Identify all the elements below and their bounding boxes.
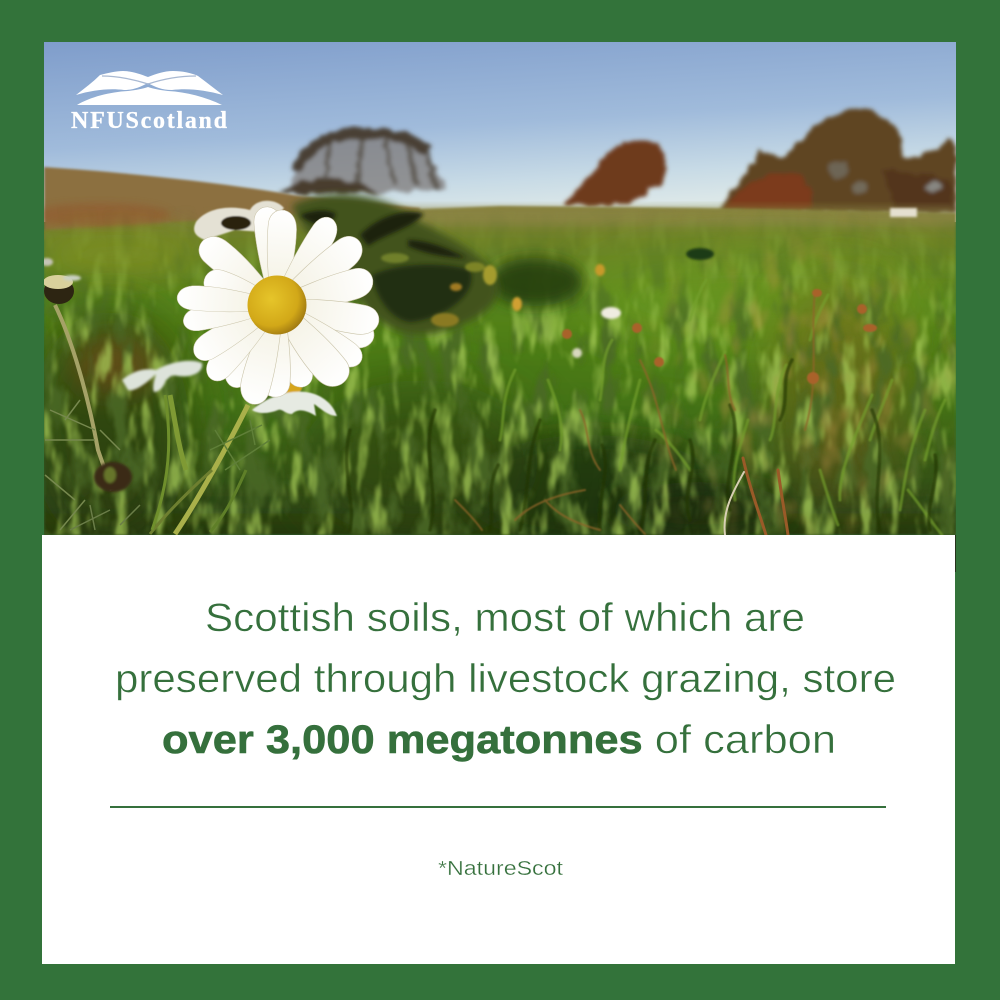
blurred daisy, left	[122, 361, 202, 392]
tree: centre right	[564, 139, 666, 206]
foreground brown stalks	[725, 458, 788, 535]
far field strip	[300, 207, 956, 225]
dark grass clump	[686, 248, 714, 260]
line 3: over 3,000 megatonnes of carbon	[162, 718, 836, 762]
daisy, lower behind	[252, 382, 337, 416]
daisy bud, left	[41, 258, 81, 304]
line 1: Scottish soils, most of which are	[205, 596, 805, 640]
seed head, lower left	[94, 462, 132, 492]
dark shadow patch in field	[487, 258, 583, 306]
NFU Scotland logo	[71, 71, 228, 134]
small dark edge beside panel	[955, 535, 956, 572]
line 2: preserved through livestock grazing, store	[115, 657, 896, 701]
distant hill	[44, 167, 420, 240]
small background flowers	[572, 208, 917, 358]
main daisy	[176, 205, 381, 408]
divider	[110, 806, 886, 808]
main statement	[115, 596, 896, 762]
grass field	[44, 206, 956, 535]
orange grass tint	[634, 236, 954, 535]
tree group: centre	[280, 133, 446, 194]
orange seed heads	[562, 289, 877, 384]
photo: daisy in grass field	[30, 42, 956, 550]
grass texture	[44, 205, 956, 535]
left stems and foliage	[45, 305, 270, 534]
white text panel	[42, 535, 955, 964]
logo mark	[76, 71, 223, 105]
source note: *NatureScot	[438, 858, 564, 880]
field light and shadow patches	[30, 203, 950, 550]
yellow centre	[248, 276, 306, 334]
daisy, upper behind	[194, 201, 284, 240]
tree group: right	[720, 107, 956, 214]
sky	[44, 42, 956, 222]
logo wordmark: NFUScotland	[71, 108, 228, 134]
grass blades	[347, 280, 945, 535]
shrub behind daisy	[292, 194, 522, 335]
petals	[176, 205, 381, 408]
